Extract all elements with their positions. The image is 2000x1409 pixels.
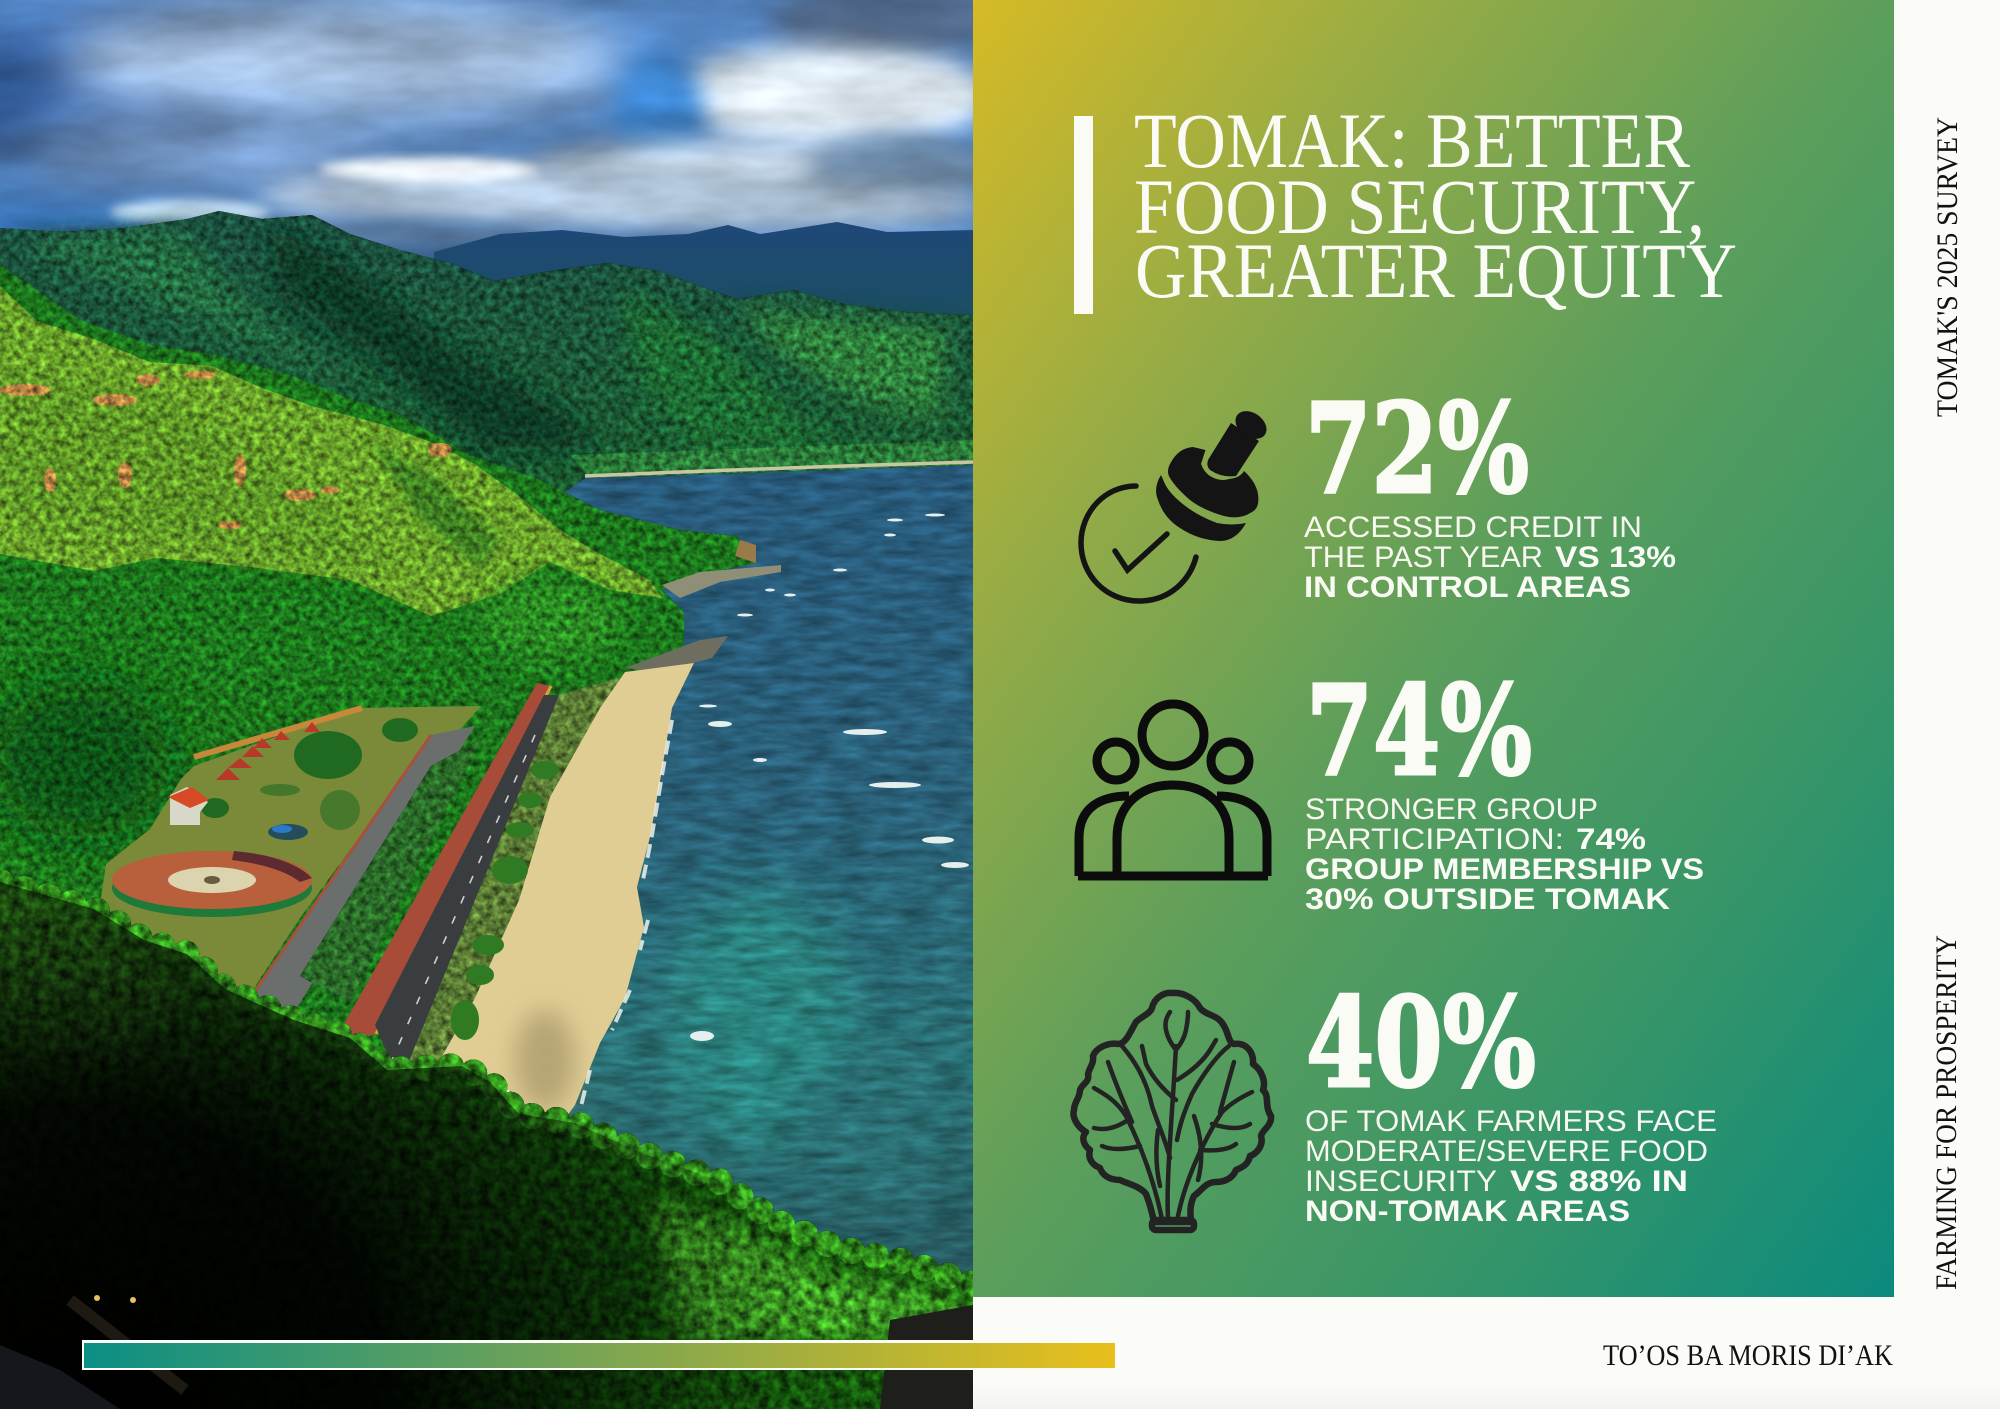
stat 2: 74%: 74% [1306, 659, 1532, 804]
stat 2: 74% [1305, 659, 1704, 916]
stat 3: 40% [1305, 971, 1717, 1228]
beach [437, 663, 694, 1123]
stat 2 description [1305, 793, 1704, 916]
stat 1 description [1304, 511, 1676, 604]
stat 2 description: PARTICIPATION: [1305, 823, 1564, 856]
land and vegetation [0, 208, 973, 1064]
left road [253, 726, 475, 1012]
icon: group of three people [1078, 704, 1268, 876]
park trees [201, 718, 418, 830]
title: GREATER EQUITY [1135, 227, 1737, 314]
title [1134, 97, 1737, 314]
title: FOOD SECURITY, [1134, 163, 1705, 250]
side label: farming for prosperity: FARMING FOR PROSPERITY [1930, 935, 1963, 1290]
stat 2 description: 30% OUTSIDE TOMAK [1305, 883, 1670, 916]
stat 2 description: STRONGER GROUP [1305, 793, 1598, 826]
foreground tree canopy [0, 882, 973, 1409]
stat 1 description: ACCESSED CREDIT IN [1304, 511, 1642, 544]
red promenade [341, 683, 550, 1043]
leaf veins [1094, 1012, 1252, 1219]
stat 3 description: MODERATE/SEVERE FOOD [1305, 1135, 1708, 1168]
stat 3 description: NON-TOMAK AREAS [1305, 1195, 1630, 1228]
lower forest shading [0, 680, 170, 840]
icon: stamp with check mark [1081, 405, 1272, 601]
wall and huts [168, 708, 362, 840]
far shoreline [585, 462, 973, 476]
breaking waves on shore [580, 720, 672, 1110]
green mid mountains [0, 211, 973, 492]
continuous land base [0, 265, 756, 1060]
stat 1 description: VS 13% [1555, 541, 1676, 574]
stat 3 description [1305, 1105, 1717, 1228]
stat 1: 72%: 72% [1305, 377, 1529, 522]
title: TOMAK: BETTER [1134, 97, 1690, 184]
trees between the roads [300, 739, 481, 1003]
rocks and stairs at bottom [0, 1295, 973, 1409]
stat 3 description: OF TOMAK FARMERS FACE [1305, 1105, 1717, 1138]
breakwater and rocky point [625, 540, 781, 672]
circular amphitheatre [112, 851, 312, 917]
photo: coastal road and mountains in Timor-Leste [0, 0, 1010, 1409]
sea [560, 460, 973, 1320]
seaside park grounds [100, 706, 481, 994]
roadside palm trees [451, 761, 559, 1040]
stat 3: 40%: 40% [1306, 971, 1536, 1116]
gradient progress bar with white border [82, 1340, 1116, 1370]
stat 3 description: INSECURITY [1305, 1165, 1497, 1198]
dark shadow over lower left [0, 882, 973, 1409]
panel: gradient statistics background [973, 0, 1894, 1297]
sky with clouds [0, 0, 973, 259]
stat 3 description: VS 88% IN [1510, 1165, 1688, 1198]
sea whitecaps [690, 514, 969, 1041]
icon: leafy green vegetable [1074, 993, 1271, 1230]
stat 2 description: GROUP MEMBERSHIP VS [1305, 853, 1704, 886]
footer tagline: TO’OS BA MORIS DI’AK [1603, 1339, 1893, 1372]
stat 2 description: 74% [1576, 823, 1646, 856]
side label: survey: TOMAK'S 2025 SURVEY [1931, 117, 1964, 417]
main coastal road [375, 695, 559, 1083]
orange soil erosion patches [0, 371, 452, 529]
stat 1 description: THE PAST YEAR [1304, 541, 1543, 574]
stat 1: 72% [1304, 377, 1676, 604]
stat 1 description: IN CONTROL AREAS [1304, 571, 1631, 604]
far mountain range [434, 222, 973, 320]
title accent bar [1074, 116, 1093, 314]
roadside vegetation strip [410, 677, 622, 1064]
grass hillside [0, 286, 662, 616]
